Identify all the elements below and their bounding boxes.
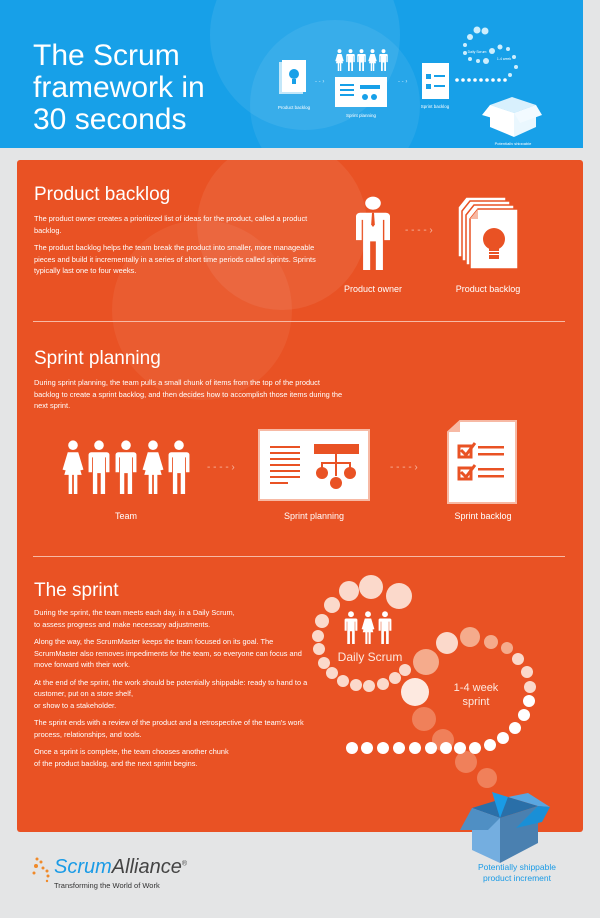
sprint cycle diagram: 1-4 week bbox=[454, 682, 499, 694]
label: potentially shippable: Potentially shippable bbox=[478, 862, 556, 872]
text: the sprint: The sprint ends with a review of the product and a retrospective of the team's work process, relationships, and tools. bbox=[34, 718, 304, 738]
text: the sprint: Along the way, the ScrumMaster keeps the team focused on its goal. The ScrumMaster also removes impediments for the team, so everyone can focus and move forward with their work. bbox=[34, 637, 302, 669]
arrow: - - - - › bbox=[207, 462, 235, 473]
mini diagram: - - › bbox=[315, 79, 324, 85]
title bbox=[33, 39, 205, 136]
text: product backlog bbox=[34, 214, 316, 275]
mini diagram bbox=[278, 26, 542, 145]
text: sprint planning: During sprint planning, the team pulls a small chunk of items from the top of the product backlog to create a sprint backlog, and then decides how to accomplish those items during the next sprint. bbox=[34, 378, 342, 410]
label: potentially shippable bbox=[478, 862, 556, 883]
text: the sprint: to assess progress and make necessary adjustments. bbox=[34, 620, 210, 628]
mini diagram: Daily Scrum bbox=[468, 50, 487, 54]
title: framework in bbox=[33, 71, 205, 104]
title: The Scrum bbox=[33, 39, 180, 72]
mini diagram: 1-4 week bbox=[497, 57, 511, 61]
arrow: - - - - › bbox=[390, 462, 418, 473]
heading: product backlog: Product backlog bbox=[34, 184, 170, 205]
mini diagram: Sprint planning bbox=[346, 113, 377, 118]
icon: product backlog bbox=[458, 198, 518, 268]
text: the sprint: or show to a stakeholder. bbox=[34, 700, 116, 710]
sprint cycle diagram: Daily Scrum bbox=[338, 650, 402, 664]
sprint cycle diagram bbox=[312, 575, 536, 788]
heading: sprint planning: Sprint planning bbox=[34, 348, 161, 369]
label: product owner: Product owner bbox=[344, 284, 402, 294]
text: the sprint: of the product backlog, and the next sprint begins. bbox=[34, 758, 198, 768]
text: the sprint: During the sprint, the team meets each day, in a Daily Scrum, bbox=[34, 608, 235, 617]
logo: scrum alliance: ScrumAlliance® bbox=[54, 856, 187, 878]
label: product backlog: Product backlog bbox=[456, 284, 520, 294]
icon: shippable box bbox=[460, 792, 550, 863]
mini diagram: Sprint backlog bbox=[421, 104, 450, 109]
orange panel bbox=[17, 160, 583, 832]
logo: scrum alliance: Transforming the World of Work bbox=[54, 881, 160, 890]
heading: the sprint: The sprint bbox=[34, 580, 118, 601]
label: sprint planning: Sprint planning bbox=[284, 511, 344, 521]
mini diagram: - - › bbox=[398, 79, 407, 85]
title: 30 seconds bbox=[33, 103, 186, 136]
icon: sprint backlog bbox=[447, 420, 517, 504]
arrow: - - - - › bbox=[405, 225, 433, 236]
icon: sprint planning board bbox=[258, 429, 370, 501]
sprint cycle diagram: sprint bbox=[463, 696, 489, 708]
header banner bbox=[0, 0, 583, 148]
icon: team bbox=[62, 440, 190, 494]
label: potentially shippable: product increment bbox=[483, 873, 551, 883]
text: the sprint: Once a sprint is complete, the team chooses another chunk bbox=[34, 747, 229, 756]
label: sprint backlog: Sprint backlog bbox=[454, 511, 512, 521]
text: product backlog: The product backlog helps the team break the product into smaller, more manageable pieces and build it incrementally in a series of short time periods called sprints. Sprints typically last one to four weeks. bbox=[34, 243, 316, 275]
logo: scrum alliance bbox=[32, 856, 187, 890]
icon: product owner bbox=[356, 196, 390, 270]
label: team: Team bbox=[115, 511, 137, 521]
text: the sprint: At the end of the sprint, the work should be potentially shippable: ready to hand to a customer, put on a store shelf, bbox=[34, 678, 307, 698]
text: product backlog: The product owner creates a prioritized list of ideas for the product, called a product backlog. bbox=[34, 214, 307, 234]
mini diagram: Product backlog bbox=[278, 105, 311, 110]
text: the sprint bbox=[34, 608, 308, 768]
